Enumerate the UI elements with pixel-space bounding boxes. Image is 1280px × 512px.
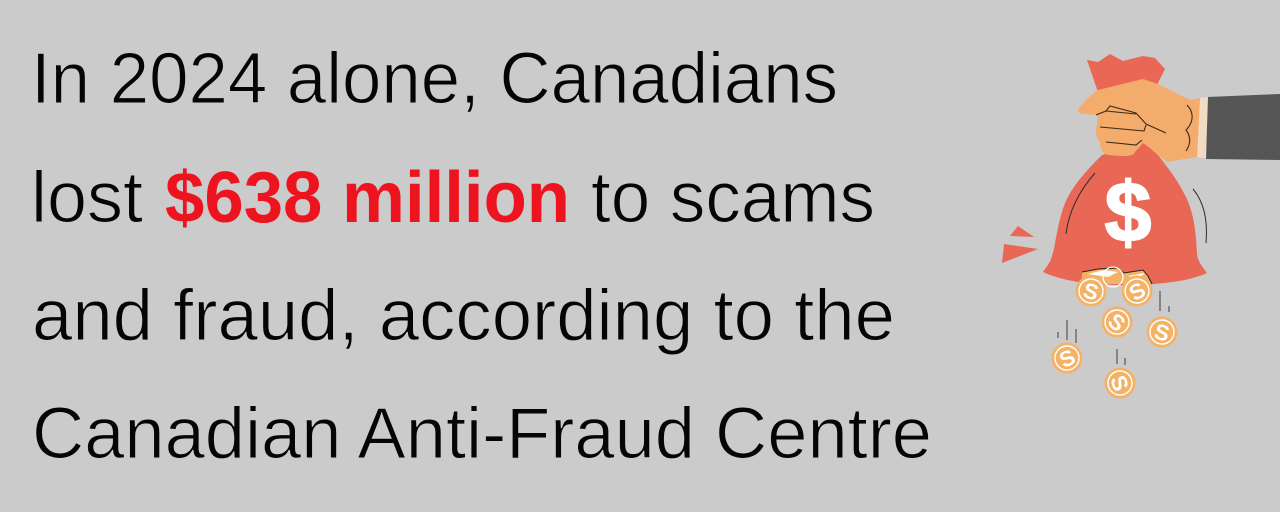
finger lines bbox=[1096, 105, 1192, 151]
coin in bag opening bbox=[1082, 267, 1152, 287]
hand bbox=[1078, 79, 1200, 162]
coin 4: S bbox=[1152, 319, 1172, 346]
illustration: hand shaking money bag bbox=[1002, 54, 1280, 398]
jacket sleeve bbox=[1206, 94, 1280, 160]
money bag body bbox=[1043, 142, 1207, 285]
coin 6: S bbox=[1105, 372, 1134, 394]
motion triangles bbox=[1002, 226, 1038, 263]
highlighted amount: $638 million bbox=[165, 158, 570, 238]
coins bbox=[1052, 276, 1178, 398]
falling motion lines bbox=[1058, 291, 1169, 365]
statement text block bbox=[31, 39, 932, 474]
line 2: lost: lost bbox=[31, 158, 143, 238]
dollar sign on bag: $ bbox=[1105, 165, 1151, 259]
line 4: Canadian Anti-Fraud Centre bbox=[32, 394, 932, 474]
line 1: In 2024 alone, Canadians bbox=[31, 39, 838, 119]
coin 1: S bbox=[1081, 278, 1101, 305]
bag neck bbox=[1087, 54, 1165, 92]
shirt cuff bbox=[1197, 97, 1208, 158]
bag crease lines bbox=[1066, 173, 1206, 243]
line 2: to scams: to scams bbox=[591, 158, 875, 238]
coin 3: S bbox=[1103, 308, 1130, 337]
line 3: and fraud, according to the bbox=[32, 276, 895, 356]
coin 2: S bbox=[1125, 277, 1150, 306]
coin 5: S bbox=[1055, 344, 1079, 373]
